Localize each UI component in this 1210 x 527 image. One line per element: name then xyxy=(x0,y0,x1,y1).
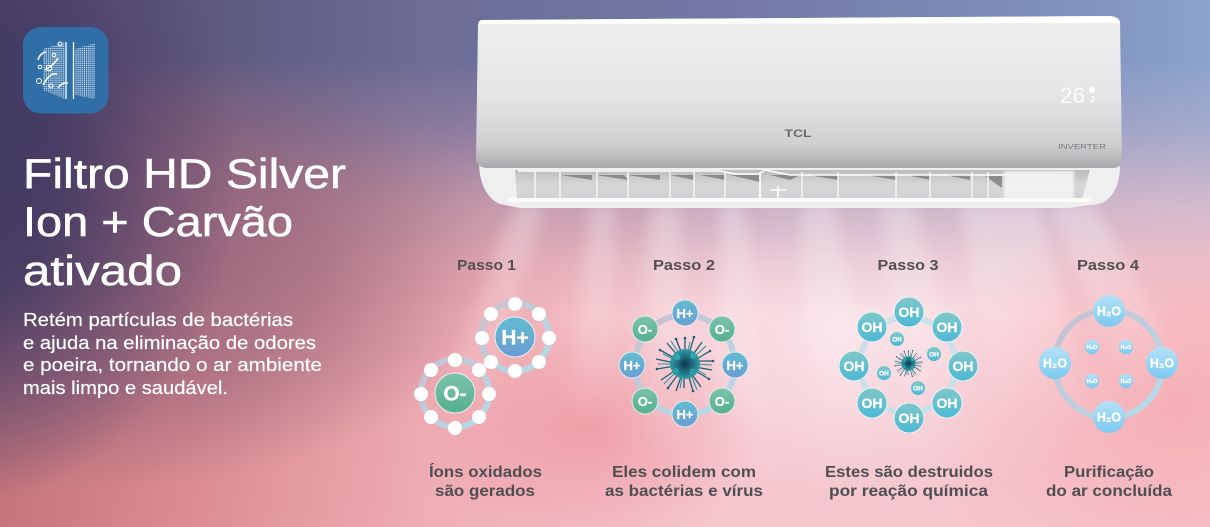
diagram: hydroxyl ring: OH xyxy=(913,386,923,392)
diagram: water molecules xyxy=(1039,295,1178,433)
step label: Passo 1 xyxy=(457,257,516,274)
caption: Eles colidem com xyxy=(612,464,756,481)
diagram: ions around virus: H+ xyxy=(677,306,694,321)
air flow rays xyxy=(430,205,1200,470)
description text: e ajuda na eliminação de odores xyxy=(23,333,316,353)
diagram: ions around virus: O- xyxy=(715,394,729,409)
title xyxy=(23,150,346,294)
step 2 xyxy=(605,257,763,500)
icon: O- atom: O- xyxy=(443,382,467,406)
title: ativado xyxy=(23,247,182,294)
icon: O- atom xyxy=(414,353,496,435)
icon: small virus xyxy=(894,350,923,377)
temperature display: 26 xyxy=(1060,83,1085,108)
caption xyxy=(429,462,542,500)
icon: H+ atom: H+ xyxy=(501,326,529,350)
diagram: water molecules: H₂O xyxy=(1087,379,1098,385)
title: Filtro HD Silver xyxy=(23,150,346,197)
diagram: ions around virus: O- xyxy=(715,322,729,337)
icon: filter xyxy=(23,27,108,114)
diagram: hydroxyl ring: OH xyxy=(862,395,882,411)
caption: Purificação xyxy=(1064,464,1154,481)
inverter label: INVERTER xyxy=(1058,142,1107,151)
icon: virus xyxy=(656,336,714,392)
step 4 xyxy=(1039,257,1178,500)
diagram: water molecules: H₂O xyxy=(1043,356,1067,370)
caption xyxy=(1046,464,1172,500)
diagram: water molecules: H₂O xyxy=(1121,345,1132,351)
description text: e poeira, tornando o ar ambiente xyxy=(23,355,322,375)
diagram: hydroxyl ring: OH xyxy=(936,319,958,335)
diagram: water molecules: H₂O xyxy=(1097,410,1121,424)
diagram: ions around virus: O- xyxy=(638,322,652,337)
diagram: hydroxyl ring: OH xyxy=(898,304,920,320)
diagram: hydroxyl ring: OH xyxy=(936,395,958,411)
icon: H+ atom xyxy=(475,297,556,378)
diagram: hydroxyl ring: OH xyxy=(952,358,974,374)
diagram: water molecules: H₂O xyxy=(1097,304,1121,318)
front panel xyxy=(476,16,1122,168)
diagram: hydroxyl ring: OH xyxy=(892,336,902,344)
diagram: ions around virus: H+ xyxy=(624,358,641,373)
step label: Passo 2 xyxy=(653,257,715,274)
diagram: ions around virus: H+ xyxy=(727,358,744,373)
step label: Passo 3 xyxy=(878,257,938,274)
caption xyxy=(605,464,763,500)
caption: por reação química xyxy=(829,483,988,500)
diagram: water molecules: H₂O xyxy=(1121,379,1132,385)
diagram: hydroxyl ring: OH xyxy=(879,370,889,378)
diagram: hydroxyl ring: OH xyxy=(862,319,882,335)
step label: Passo 4 xyxy=(1077,257,1140,274)
title: Ion + Carvão xyxy=(23,198,293,245)
step 3 xyxy=(825,257,993,500)
diagram: hydroxyl ring: OH xyxy=(929,352,939,358)
diagram: hydroxyl ring: OH xyxy=(844,358,864,374)
diagram: hydroxyl ring xyxy=(839,297,978,433)
description text: Retém partículas de bactérias xyxy=(23,310,293,330)
caption: as bactérias e vírus xyxy=(605,483,763,500)
brand logo: TCL xyxy=(784,128,812,140)
diagram: water molecules: H₂O xyxy=(1150,356,1174,370)
diagram: hydroxyl ring: OH xyxy=(898,410,920,426)
diagram: ions around virus: H+ xyxy=(677,407,694,422)
diagram: water molecules: H₂O xyxy=(1087,345,1098,351)
air vent with slats xyxy=(508,170,1090,202)
diagram: ions around virus: O- xyxy=(638,394,652,409)
caption xyxy=(825,464,993,500)
caption: do ar concluída xyxy=(1046,483,1172,500)
diagram: ions around virus xyxy=(619,300,748,427)
air conditioner unit xyxy=(476,16,1122,208)
temperature display xyxy=(1060,83,1095,108)
caption: são gerados xyxy=(435,483,535,500)
step 1 xyxy=(414,257,556,500)
caption: Íons oxidados xyxy=(429,462,542,481)
caption: Estes são destruidos xyxy=(825,464,993,481)
description text xyxy=(23,310,322,398)
lower housing xyxy=(479,165,1120,208)
description text: mais limpo e saudável. xyxy=(23,378,228,398)
